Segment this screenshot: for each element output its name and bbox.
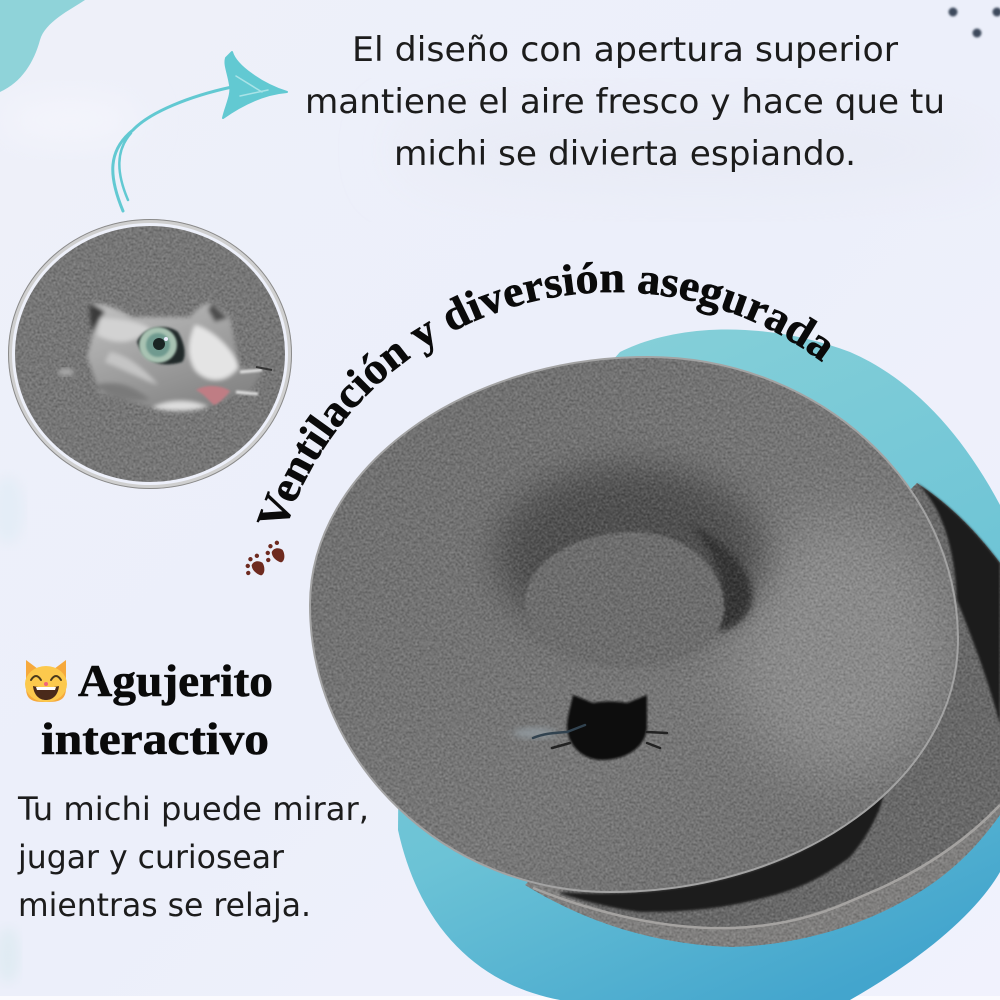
- inset frame rings: [8, 220, 292, 488]
- heading text: top description: michi se divierta espiando.: [394, 134, 856, 173]
- cat-shaped hole: [513, 695, 667, 760]
- bed tray floor: [560, 483, 1000, 927]
- decorative dots: top-right: [948, 8, 1000, 38]
- tray rim: [533, 805, 1000, 928]
- text block: interactive hole description: mientras se relaja.: [18, 886, 311, 924]
- heading text: top description: [305, 30, 945, 173]
- icon: paw prints: [243, 540, 286, 578]
- heading text: top description: mantiene el aire fresco y hace que tu: [305, 82, 945, 121]
- heading text: top description: El diseño con apertura superior: [352, 30, 898, 69]
- cat nose: [196, 386, 230, 405]
- cat face: [58, 303, 272, 411]
- icon: smiling cat emoji: [25, 660, 67, 702]
- disc shading: [495, 465, 950, 780]
- teal blob behind bed: [398, 330, 1000, 1000]
- text block: interactive hole description: Tu michi puede mirar,: [17, 790, 369, 828]
- heading: interactive hole: interactivo: [41, 714, 269, 764]
- inset felt: [15, 226, 285, 482]
- whiskers: [236, 370, 262, 394]
- teal blob: top-left corner: [0, 0, 85, 92]
- cat bed: [310, 357, 1000, 947]
- cat eye: [137, 327, 185, 364]
- heading: interactive hole: Agujerito: [78, 656, 273, 706]
- heading: interactive hole: [25, 656, 273, 764]
- icon: curved arrow: [113, 52, 287, 211]
- inset: cat peeking through hole: [8, 220, 292, 488]
- bed tray outer: [525, 483, 1000, 947]
- disc lid with felt texture: [310, 357, 958, 892]
- disc hole: [525, 532, 724, 667]
- text block: interactive hole description: jugar y curiosear: [17, 838, 285, 876]
- curved heading: Ventilación y diversión asegurada: [256, 262, 830, 522]
- text block: interactive hole description: [17, 790, 369, 924]
- disc rim: [310, 357, 958, 892]
- tray dark interior: [557, 483, 1000, 912]
